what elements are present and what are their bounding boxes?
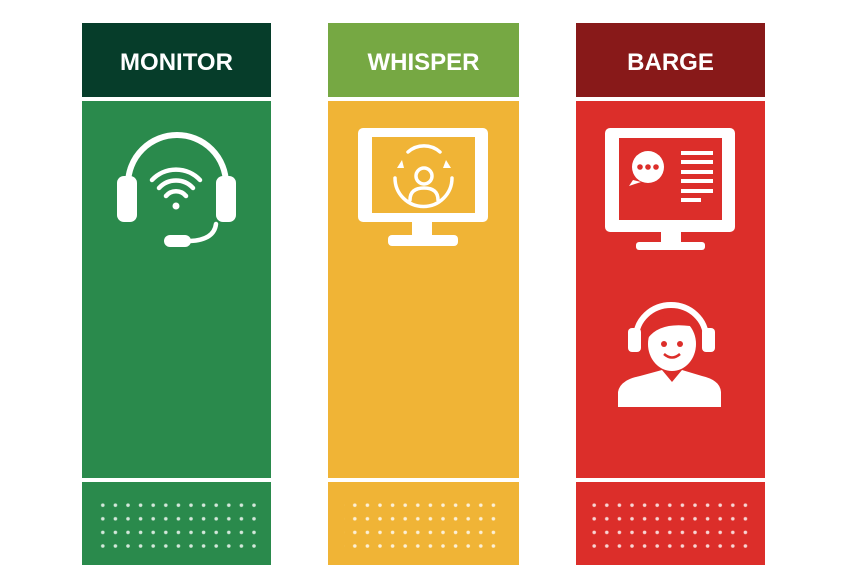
heading: monitor — [82, 23, 271, 97]
icon: monitor with user — [358, 128, 488, 246]
body: monitor — [82, 101, 271, 478]
heading: barge: BARGE — [627, 49, 714, 76]
body: barge — [576, 101, 765, 478]
footer: whisper dots — [328, 482, 519, 565]
icon: monitor with chat — [605, 128, 735, 250]
heading: barge — [576, 23, 765, 97]
panel: barge — [576, 23, 765, 565]
panel: whisper — [328, 23, 519, 565]
footer: barge dots — [576, 482, 765, 565]
heading: monitor: MONITOR — [120, 49, 233, 76]
footer: monitor dots — [82, 482, 271, 565]
icon: headset with wifi — [117, 135, 236, 247]
heading: whisper — [328, 23, 519, 97]
body: whisper — [328, 101, 519, 478]
heading: whisper: WHISPER — [367, 49, 480, 76]
icon: agent with headset — [618, 305, 721, 407]
panel: monitor — [82, 23, 271, 565]
